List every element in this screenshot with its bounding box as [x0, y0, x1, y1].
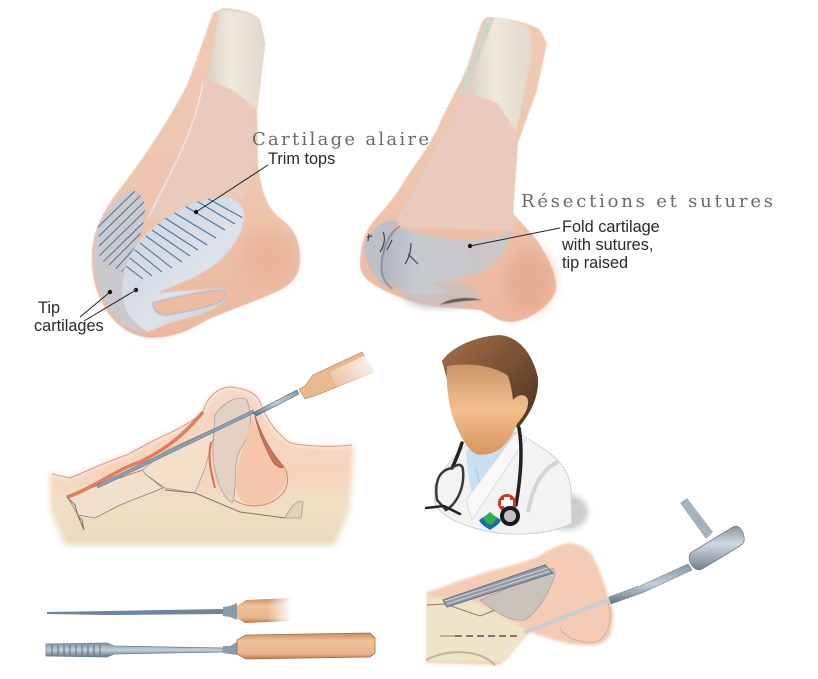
stethoscope chest piece [500, 506, 520, 526]
label: Trim tops leader [194, 165, 268, 214]
nasal bone [468, 17, 532, 133]
bone and incision [67, 470, 163, 518]
label: Fold cartilage: with sutures, [561, 236, 653, 254]
right tip cartilage with hatching [122, 197, 244, 332]
label: Trim tops: Trim tops [268, 150, 335, 168]
skin slit below cartilage [153, 290, 225, 315]
upper lip shadow [285, 501, 303, 518]
nasal bone [207, 10, 265, 110]
face skin [50, 387, 354, 545]
chisel [523, 597, 611, 634]
label: Fold cartilage: tip raised [562, 254, 628, 272]
shadow [544, 494, 588, 530]
rasp blades in nose [443, 565, 553, 607]
label: Tip cartilages: cartilages [34, 317, 104, 335]
rasp handle [299, 352, 378, 399]
label: tip cartilages leaders [80, 288, 138, 321]
illustration: two rasps [46, 595, 375, 659]
nasal cartilage block [480, 568, 555, 620]
illustration: nose, folded cartilage with sutures [360, 17, 560, 322]
nostril canal [255, 416, 283, 468]
badge: red cross [498, 494, 516, 512]
icon: doctor [426, 335, 588, 534]
illustration: chisel and hammer on nose [426, 498, 744, 665]
label: fold cartilage leader [468, 228, 560, 248]
white coat [434, 432, 572, 534]
nose skin outline [92, 8, 300, 338]
heading: Résections et sutures: Résections et sutures [521, 191, 773, 212]
nostril [440, 298, 482, 305]
heading: Cartilage alaire: Cartilage alaire [252, 129, 429, 150]
badge: green and blue heart [479, 512, 501, 530]
sutures [367, 232, 418, 264]
upper lateral cartilage [398, 95, 515, 230]
nose cartilage and ala [213, 398, 251, 503]
face [447, 364, 528, 455]
shirt [466, 432, 516, 505]
hair [442, 335, 538, 428]
upper lateral cartilage [147, 80, 257, 222]
hammer [680, 498, 744, 570]
folded alar cartilage [365, 220, 512, 309]
illustration: rasp inserted in nose, profile [50, 352, 378, 545]
coarse rasp [46, 633, 375, 659]
fine rasp [47, 595, 292, 625]
nose skin outline [360, 17, 556, 322]
label: Tip cartilages: Tip [38, 299, 60, 317]
left tip cartilage with hatching [94, 188, 148, 334]
stethoscope [426, 428, 521, 514]
rasp [97, 410, 254, 488]
illustration: nose, alar cartilage trimming [80, 8, 300, 338]
label: Fold cartilage: Fold cartilage [562, 218, 660, 236]
nose and face [427, 543, 613, 665]
